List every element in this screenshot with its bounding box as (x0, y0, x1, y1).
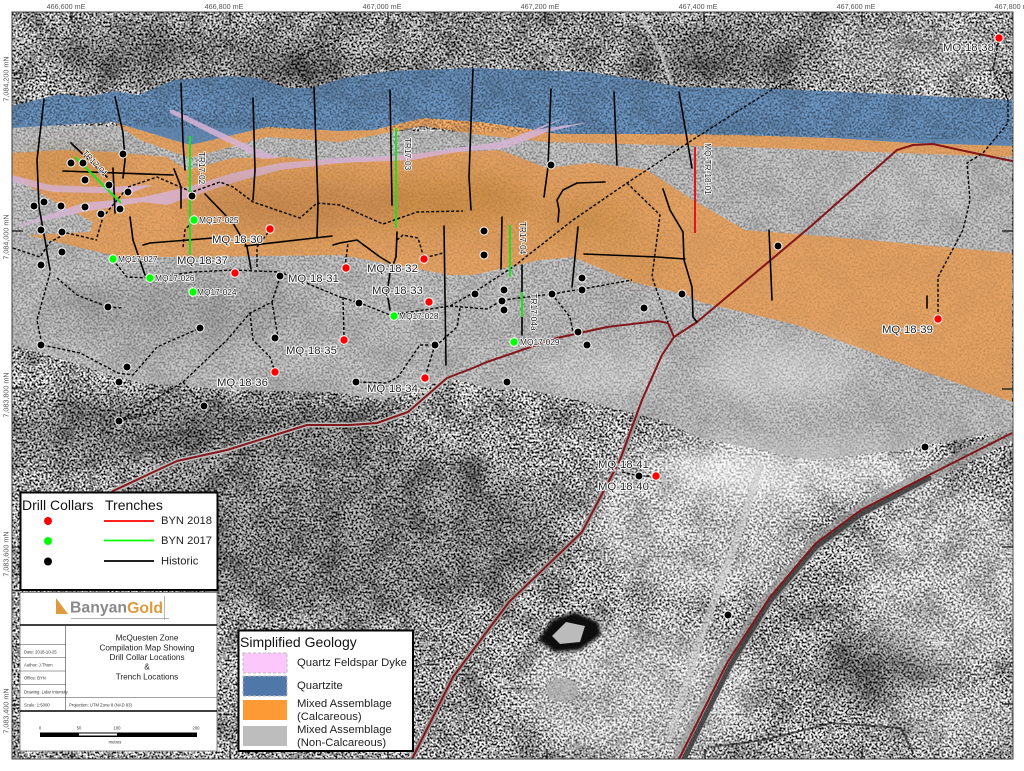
red drill collars (231, 34, 1003, 480)
2018 collar labels: MQ-18-33 (372, 285, 423, 297)
geology: quartzite (12, 68, 1012, 146)
2017 collar labels: MQ17-026 (155, 273, 195, 283)
drawing metadata: Drawing: Lidar Intensity (24, 690, 69, 694)
axis labels: northing: 7,083,600 mN (2, 531, 10, 577)
axis labels: northing: 7,083,400 mN (2, 688, 10, 734)
2017 collar labels: MQ17-028 (399, 311, 439, 321)
legend row: BYN 2017 (44, 535, 212, 547)
axis labels: northing: 7,083,800 mN (2, 372, 10, 418)
geology: mixed assemblage non-calcareous (12, 125, 1012, 460)
trench labels: TR17-04a (529, 293, 539, 331)
2018 collar labels: MQ-18-35 (286, 345, 337, 357)
drawing metadata: Scale: 1:5000 (24, 702, 50, 708)
swatch: quartzite: Quartzite (297, 680, 343, 692)
legend row: BYN 2018 (44, 515, 212, 527)
2017 collar labels (118, 215, 560, 347)
scale bar: 0 (39, 726, 42, 730)
legend heading: Simplified Geology (240, 634, 357, 650)
legend row: historic (44, 556, 199, 568)
2018 collar labels: MQ-18-39 (882, 324, 933, 336)
drawing metadata: Author: J.Thom (24, 662, 53, 668)
axis labels: easting: 466,800 mE (205, 2, 244, 11)
trench labels: TR17-04 (518, 222, 528, 255)
swatch: mixed assemblage non-calcareous (243, 724, 392, 749)
trench labels: MQ-TR-18-01 (703, 143, 713, 195)
trench labels: TR17-02 (197, 152, 207, 185)
2018 collar labels: MQ-18-34 (367, 383, 418, 395)
panel: drill collars and trenches legend (20, 492, 218, 590)
scale bar: metres (109, 740, 121, 744)
panel: simplified geology legend (238, 630, 413, 751)
2018 collar labels: MQ-18-32 (367, 263, 418, 275)
2017 collar labels: MQ17-025 (199, 215, 239, 225)
panel: geology units overlay (12, 68, 1012, 460)
2018 collar labels: MQ-18-41 (598, 459, 649, 471)
scale bar (39, 726, 200, 744)
drawing metadata (24, 650, 132, 708)
historic trenches (37, 69, 927, 365)
dashed historic tracks (13, 13, 1008, 476)
swatch: quartz feldspar dyke (243, 653, 407, 673)
map title text: Compilation Map Showing (99, 644, 195, 652)
axis labels: northing: 7,084,000 mN (2, 214, 10, 260)
green drill collars (109, 216, 518, 346)
2018 collar labels (177, 42, 994, 493)
legend row: BYN 2017: BYN 2017 (161, 535, 212, 547)
swatch: mixed assemblage calcareous: (Calcareous) (297, 711, 362, 723)
roads (20, 144, 1012, 759)
thin road branches (370, 397, 460, 667)
map title text (99, 634, 195, 682)
2018 collar labels: MQ-18-40 (598, 481, 649, 493)
drawing metadata: Office: BYN (24, 676, 46, 680)
map title text: McQuesten Zone (116, 634, 179, 642)
pond (538, 612, 601, 702)
2017 collar labels: MQ17-027 (118, 254, 158, 264)
2017 collar labels: MQ17-029 (520, 337, 560, 347)
map title text: Trench Locations (116, 672, 178, 682)
trench labels: TR17-03 (403, 138, 413, 171)
2017 collar labels: MQ17-024 (197, 287, 237, 297)
2018 collar labels: MQ-18-31 (288, 273, 339, 285)
axis labels: northing: 7,084,200 mN (2, 56, 10, 102)
axis labels: easting (47, 2, 1024, 11)
map title text: & (144, 662, 150, 672)
axis labels: northing (2, 56, 10, 734)
swatch: quartz feldspar dyke: Quartz Feldspar Dyke (297, 657, 407, 669)
2018 collar labels: MQ-18-36 (217, 377, 268, 389)
legend row: BYN 2018: BYN 2018 (161, 515, 212, 527)
axis labels: easting: 467,400 mE (679, 2, 718, 11)
drawing metadata: Projection: UTM Zone 8 (NAD 83) (69, 702, 132, 708)
legend heading: trenches: Trenches (105, 497, 163, 513)
axis labels: easting: 467,600 mE (837, 2, 876, 11)
legend row: historic: Historic (161, 556, 199, 568)
swatch: mixed assemblage calcareous: Mixed Assemblage (297, 698, 392, 710)
2018 collar labels: MQ-18-37 (177, 255, 228, 267)
trench labels: TR17-01 (80, 148, 110, 179)
scale bar: 200 (192, 726, 200, 730)
swatch: mixed assemblage calcareous (243, 698, 392, 723)
geology tone patches (20, 155, 980, 400)
swatch: mixed assemblage non-calcareous: Mixed Assemblage (297, 724, 392, 736)
legend heading: drill collars: Drill Collars (22, 497, 94, 513)
2018 collar labels: MQ-18-30 (212, 234, 263, 246)
logo: Banyan Gold (56, 596, 169, 620)
map title text: Drill Collar Locations (109, 653, 185, 662)
trench labels (80, 138, 713, 331)
geology: mixed assemblage calcareous (12, 118, 1012, 402)
2018 trench (694, 147, 696, 233)
panel: title block (20, 592, 217, 751)
drawing metadata: Date: 2018-10-25 (24, 650, 57, 654)
scale bar: 50 (77, 726, 82, 730)
2017 trenches (75, 128, 522, 317)
geology: quartz feldspar dyke (12, 110, 590, 226)
scale bar: 100 (114, 726, 121, 730)
axis labels: easting: 466,600 mE (47, 2, 86, 11)
black drill collars (30, 150, 929, 619)
logo: Banyan Gold: BanyanGold (70, 600, 163, 616)
swatch: quartzite (243, 676, 343, 696)
2018 collar labels: MQ-18-38 (943, 42, 994, 54)
axis labels: easting: 467,200 mE (521, 2, 560, 11)
axis labels: easting: 467,000 mE (363, 2, 402, 11)
swatch: mixed assemblage non-calcareous: (Non-Calcareous) (297, 737, 386, 749)
